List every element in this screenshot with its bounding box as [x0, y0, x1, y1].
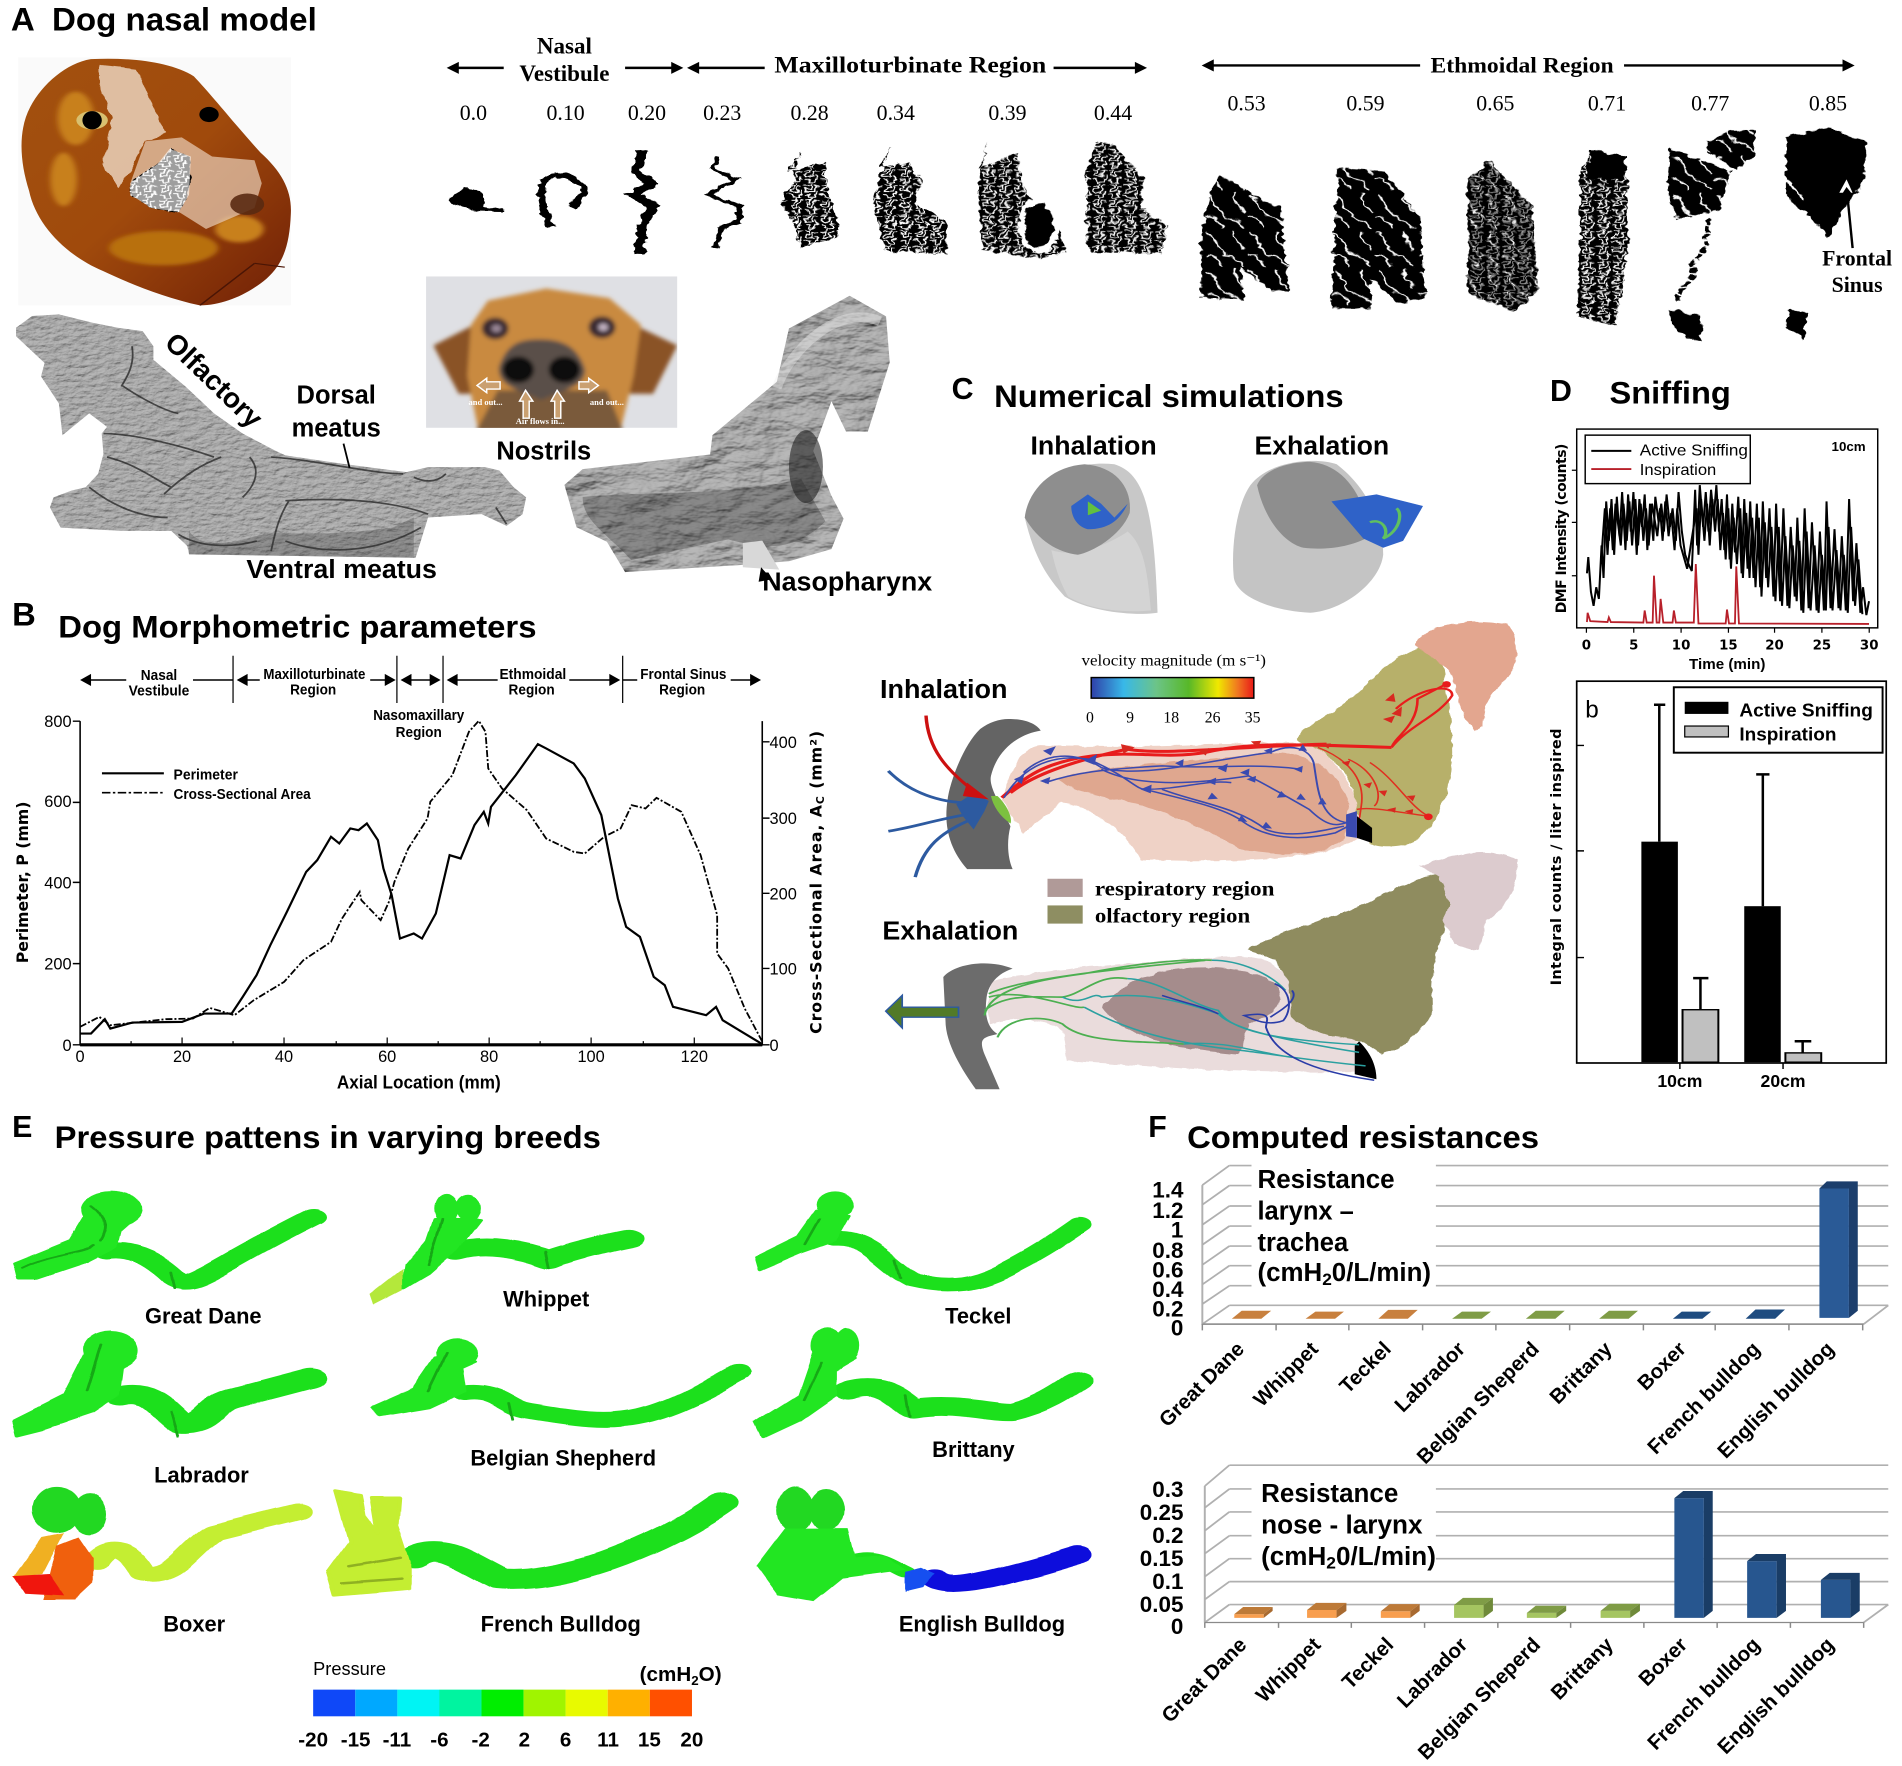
left axis labels: 600 [44, 793, 72, 811]
label: nostrils: Nostrils [496, 437, 591, 465]
chart title: Resistance [1261, 1480, 1398, 1508]
breed labels: Belgian Shepherd [470, 1445, 656, 1470]
x axis breed labels: Teckel [1335, 1338, 1396, 1398]
arrow: frontal sinus pointer [1839, 179, 1853, 248]
airway model: Whippet [371, 1194, 628, 1305]
airway model: Great Dane [14, 1191, 314, 1289]
chart legend: Perimeter [174, 767, 238, 783]
region labels: Region [659, 683, 705, 699]
perimeter curve [80, 744, 761, 1044]
x axis breed labels: Labrador [1390, 1338, 1470, 1417]
chart title: larynx – [1257, 1197, 1354, 1225]
axis title: cross-sectional area: Cross-Sectional Area, A [807, 805, 826, 1034]
cross-sections: maxilloturbinate and ethmoidal [977, 128, 1866, 340]
x axis breed labels: Whippet [1252, 1633, 1325, 1707]
chart title: 0/L/min) [1336, 1543, 1436, 1571]
legend: Active Sniffing [1739, 700, 1873, 720]
nostrils photo: and out... [590, 397, 624, 407]
y axis values: 0.25 [1140, 1500, 1183, 1525]
label: exhalation: Exhalation [1254, 433, 1389, 461]
heading F: F [1148, 1111, 1167, 1144]
pressure colour scale: -15 [341, 1729, 371, 1752]
pressure colour scale [298, 1659, 722, 1752]
label: inhalation: Inhalation [1031, 433, 1157, 461]
pressure colour scale: O) [699, 1663, 722, 1686]
model: head exhalation [1233, 461, 1423, 613]
inspiration trace [1587, 564, 1869, 624]
label: dorsal meatus [292, 382, 381, 468]
region header: nasal vestibule [447, 32, 683, 86]
cross-section position labels: 0.20 [628, 101, 666, 125]
y axis title: DMF Intensity (counts) [1554, 444, 1570, 613]
bars and error bars [1641, 705, 1821, 1062]
breed labels: Great Dane [145, 1304, 262, 1329]
right axis labels: 300 [770, 810, 797, 828]
axis title: cross-sectional area: C [814, 796, 827, 804]
pressure colour scale: 15 [638, 1729, 661, 1752]
y axis values: 0 [1171, 1614, 1183, 1639]
region header: ethmoidal [1202, 54, 1855, 78]
panel C: numerical simulations [880, 373, 1517, 1089]
heading B: B [12, 595, 36, 632]
chart grid and bars [1202, 1161, 1888, 1330]
label: ventral meatus: Ventral meatus [246, 556, 437, 584]
chart legend: Cross-Sectional Area [174, 787, 312, 803]
left axis labels: 400 [44, 874, 72, 892]
axis ticks and numbers: 25 [1813, 639, 1831, 654]
right axis labels: 400 [770, 734, 797, 752]
pressure colour scale: 2 [519, 1729, 530, 1752]
x axis breed labels: Great Dane [1157, 1633, 1251, 1727]
y axis title: Integral counts / liter inspired [1548, 728, 1565, 985]
chart axes [73, 721, 770, 1045]
cross-section position labels: 0.23 [703, 101, 741, 125]
letter b: b [1585, 697, 1599, 724]
velocity colour bar: 9 [1126, 709, 1134, 726]
right axis labels: 100 [770, 961, 797, 979]
chart title: nose - larynx [1261, 1511, 1423, 1539]
legend: Inspiration [1739, 725, 1836, 745]
chart: resistance larynx-trachea [1152, 1161, 1888, 1469]
pressure colour scale: 20 [680, 1729, 703, 1752]
axis ticks and numbers: 10 [1672, 639, 1690, 654]
region header: maxilloturbinate [687, 52, 1147, 78]
region labels: Nasal [141, 668, 177, 684]
chart title [1261, 1480, 1436, 1572]
chart grid and bars [1205, 1465, 1888, 1628]
region labels: Nasomaxillary [373, 708, 465, 724]
plot frame [1577, 681, 1886, 1063]
x axis breed labels: Labrador [1393, 1633, 1472, 1713]
x axis breed labels: Boxer [1633, 1338, 1691, 1395]
pressure colour scale: -6 [430, 1729, 449, 1752]
pressure colour scale: 2 [691, 1673, 699, 1688]
nostrils photo: and out... [469, 397, 503, 407]
cross-section position labels: 0.77 [1691, 91, 1729, 115]
x axis breed labels: Belgian Sheperd [1412, 1338, 1544, 1469]
y axis values: 0.4 [1152, 1277, 1184, 1302]
nasopharynx opening [743, 541, 779, 582]
chart title [1257, 1166, 1431, 1289]
pressure colour scale: (cmH [640, 1663, 691, 1686]
velocity colour bar [1081, 652, 1266, 726]
cross-section position labels: 0.59 [1346, 91, 1385, 115]
x axis title: Time (min) [1689, 656, 1765, 673]
y axis values: 0.6 [1152, 1258, 1183, 1283]
velocity colour bar: 35 [1245, 709, 1261, 726]
nostrils photo: Air flows in... [516, 416, 564, 426]
pressure colour scale: -11 [383, 1729, 411, 1752]
axis ticks and numbers: 15 [1719, 639, 1738, 654]
chart title: (cmH [1257, 1259, 1321, 1287]
heading text: Pressure pattens in varying breeds [55, 1119, 601, 1155]
legend: respiratory and olfactory regions [1047, 879, 1275, 927]
panel B: morphometric parameters [12, 595, 827, 1092]
label: inhalation streamlines: Inhalation [880, 676, 1007, 704]
x axis labels [76, 1048, 708, 1066]
x axis breed labels: English bulldog [1713, 1633, 1839, 1759]
region header: maxilloturbinate: Maxilloturbinate Region [774, 52, 1046, 78]
nostrils photo [426, 276, 677, 436]
cross-section position labels: 0.39 [988, 101, 1027, 125]
y axis values: 1.2 [1152, 1198, 1183, 1223]
region header: ethmoidal: Ethmoidal Region [1430, 54, 1614, 78]
x axis labels: 20 [173, 1048, 191, 1066]
right axis labels: 0 [770, 1037, 779, 1055]
cross-section position labels: 0.44 [1094, 101, 1132, 125]
breed labels: Teckel [945, 1304, 1012, 1329]
y axis values: 0.2 [1152, 1296, 1183, 1321]
legend: Inspiration [1640, 462, 1716, 479]
axis title: perimeter: Perimeter, P (mm) [13, 802, 32, 963]
annotation: 10cm: 10cm [1832, 439, 1866, 454]
cross-section position labels: 0.28 [790, 101, 829, 125]
chart title: Resistance [1257, 1166, 1395, 1194]
heading C: C [952, 373, 974, 406]
cross-section position labels: 0.53 [1227, 91, 1266, 115]
chart: resistance nose-larynx [1140, 1465, 1888, 1764]
heading text: Computed resistances [1187, 1119, 1539, 1155]
heading text: Numerical simulations [994, 378, 1344, 414]
axis ticks and group labels: 20cm [1761, 1071, 1806, 1091]
plot frame [1577, 429, 1878, 628]
axis ticks and numbers [1572, 470, 1879, 654]
breed labels: Brittany [932, 1437, 1016, 1462]
pressure colour scale: -2 [471, 1729, 490, 1752]
label: dorsal meatus: Dorsal [297, 382, 376, 410]
heading text: Dog Morphometric parameters [58, 609, 536, 645]
pressure colour scale: 11 [597, 1729, 619, 1752]
cross-section position labels [460, 91, 1847, 125]
axis ticks and numbers: 5 [1629, 639, 1638, 654]
airway model: French Bulldog [328, 1491, 722, 1595]
x axis breed labels: English bulldog [1713, 1338, 1839, 1463]
y axis values: 0.05 [1140, 1592, 1183, 1617]
velocity colour bar: 18 [1163, 709, 1179, 726]
airway model: Teckel [756, 1192, 1081, 1285]
breed labels: English Bulldog [899, 1611, 1065, 1636]
cross-section position labels: 0.71 [1588, 91, 1626, 115]
x axis breed labels: Brittany [1546, 1633, 1618, 1705]
x axis breed labels: Whippet [1249, 1337, 1323, 1411]
3D cast: right view [564, 296, 890, 572]
panel F: computed resistances [1140, 1111, 1888, 1764]
cross-section position labels: 0.10 [547, 101, 585, 125]
heading D: D [1550, 375, 1572, 408]
region labels: Maxilloturbinate [263, 667, 365, 683]
axis ticks and numbers: 0 [1582, 639, 1591, 654]
axis title: axial location: Axial Location (mm) [337, 1072, 501, 1092]
x axis breed labels: Belgian Sheperd [1414, 1633, 1545, 1764]
region labels [129, 667, 726, 741]
label: exhalation streamlines: Exhalation [882, 917, 1018, 945]
region labels: Region [396, 725, 442, 741]
legend: respiratory and olfactory regions: respiratory region [1095, 879, 1275, 901]
region labels: Vestibule [129, 684, 189, 700]
left axis labels: 0 [62, 1037, 72, 1055]
panel A: dog nasal model [11, 0, 1892, 596]
left axis labels: 800 [44, 713, 72, 731]
DMF intensity time-series chart [1554, 429, 1879, 673]
y axis values: 0.2 [1152, 1523, 1183, 1548]
3D cast: left lateral view [16, 314, 526, 558]
cross-section position labels: 0.0 [460, 101, 487, 125]
label: frontal sinus: Frontal [1822, 246, 1892, 270]
axis ticks and group labels [1577, 745, 1806, 1091]
x axis labels: 120 [681, 1048, 708, 1066]
illustration: dog head with transparent nasal cavity [18, 57, 291, 305]
cross-sections: vestibule and maxilloturbinate [447, 147, 948, 254]
x axis labels: 100 [577, 1048, 605, 1066]
y axis values [1140, 1477, 1183, 1639]
chart title: 2 [1326, 1553, 1336, 1572]
legend [1585, 435, 1750, 484]
breed labels: Boxer [163, 1611, 226, 1636]
airway model: Brittany [756, 1328, 1077, 1437]
heading A: A Dog nasal model [11, 0, 317, 37]
panel E: pressure patterns [12, 1111, 1081, 1752]
axis title: cross-sectional area: (mm²) [807, 731, 826, 795]
x axis breed labels: French bulldog [1643, 1338, 1765, 1459]
legend: Active Sniffing [1640, 443, 1748, 460]
x axis breed labels [1157, 1633, 1839, 1764]
pressure colour scale: 6 [560, 1729, 571, 1752]
x axis breed labels [1155, 1337, 1839, 1469]
heading text: Sniffing [1609, 375, 1731, 411]
airway model: Labrador [14, 1330, 310, 1437]
y axis values: 0.15 [1140, 1546, 1183, 1571]
region dividers and arrows [80, 656, 761, 703]
left axis labels [44, 713, 72, 1055]
region header: nasal vestibule: Nasal [537, 32, 592, 58]
cross-sectional area curve [80, 721, 762, 1042]
integral counts bar chart [1548, 681, 1886, 1091]
velocity colour bar: 26 [1205, 709, 1221, 726]
breed labels [145, 1287, 1065, 1636]
legend [1674, 687, 1883, 753]
left axis labels: 200 [44, 956, 72, 974]
x axis labels: 80 [480, 1048, 498, 1066]
axis ticks and group labels: 10cm [1657, 1071, 1702, 1091]
breed labels: Whippet [503, 1287, 589, 1312]
legend: respiratory and olfactory regions: olfactory region [1095, 905, 1251, 927]
chart title: trachea [1257, 1229, 1349, 1257]
x axis breed labels: Brittany [1545, 1337, 1617, 1409]
cross-section position labels: 0.34 [877, 101, 915, 125]
region labels: Region [290, 683, 336, 699]
label: dorsal meatus: meatus [292, 414, 381, 442]
airway model: English Bulldog [756, 1487, 1079, 1602]
label: nasopharynx: Nasopharynx [762, 568, 932, 596]
chart title: (cmH [1261, 1543, 1325, 1571]
axis ticks and numbers: 20 [1765, 639, 1784, 654]
active sniffing trace [1587, 485, 1869, 615]
chart title: 0/L/min) [1332, 1259, 1431, 1287]
x axis labels: 60 [378, 1048, 396, 1066]
chart title: 2 [1322, 1270, 1332, 1289]
cross-section position labels: 0.85 [1809, 91, 1847, 115]
x axis breed labels: Great Dane [1155, 1338, 1249, 1431]
axis ticks and numbers: 30 [1860, 639, 1879, 654]
inhalation flow model [888, 622, 1516, 877]
heading E: E [12, 1111, 32, 1144]
airway model: Boxer [14, 1487, 298, 1600]
x axis breed labels: French bulldog [1643, 1633, 1765, 1755]
y axis values: 0.3 [1152, 1477, 1183, 1502]
exhalation flow model [886, 852, 1517, 1089]
model: head inhalation [1025, 464, 1158, 614]
breed labels: Labrador [154, 1462, 249, 1487]
y axis values: 0.1 [1152, 1569, 1183, 1594]
pressure colour scale: Pressure [313, 1659, 386, 1679]
panel D: sniffing [1548, 375, 1886, 1091]
x axis labels: 0 [76, 1048, 85, 1066]
region labels: Ethmoidal [499, 667, 566, 683]
label: frontal sinus [1822, 246, 1892, 297]
x axis breed labels: Boxer [1634, 1633, 1692, 1691]
y axis values: 0.8 [1152, 1238, 1183, 1263]
region labels: Frontal Sinus [640, 667, 726, 683]
pressure colour scale: -20 [298, 1729, 328, 1752]
velocity colour bar: velocity magnitude (m s⁻¹) [1081, 652, 1266, 669]
velocity colour bar: 0 [1086, 709, 1094, 726]
region labels: Region [509, 683, 555, 699]
region header: nasal vestibule: Vestibule [519, 60, 609, 86]
y axis values: 1.4 [1152, 1178, 1184, 1203]
cross-section position labels: 0.65 [1476, 91, 1515, 115]
label: frontal sinus: Sinus [1832, 273, 1883, 297]
right axis labels [770, 734, 797, 1055]
right axis labels: 200 [770, 885, 797, 903]
airway model: Belgian Shepherd [371, 1339, 738, 1420]
breed labels: French Bulldog [481, 1611, 641, 1636]
y axis values [1152, 1178, 1184, 1341]
x axis breed labels: Teckel [1338, 1633, 1398, 1694]
y axis values: 1 [1171, 1218, 1183, 1243]
label: olfactory: Olfactory [159, 327, 269, 434]
chart legend [102, 767, 312, 803]
x axis labels: 40 [275, 1048, 293, 1066]
y axis values: 0 [1171, 1316, 1183, 1341]
